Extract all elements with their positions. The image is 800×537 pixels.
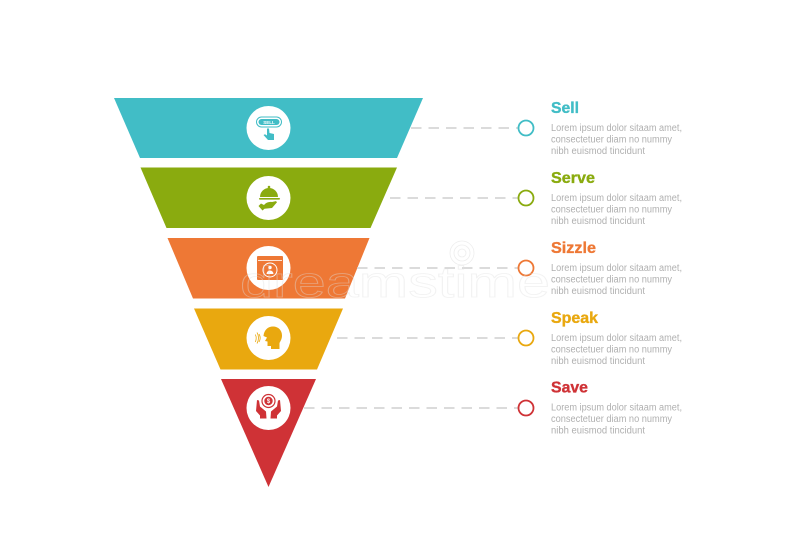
connector: sell: [411, 127, 519, 129]
connector: speak: [337, 337, 519, 339]
watermark: dreamstime: [240, 258, 550, 307]
icon: serving cloche on hand: [246, 176, 290, 220]
funnel layer: sizzle: [168, 238, 370, 298]
text block: sizzle: Lorem ipsum dolor sitaam amet,: [551, 263, 682, 274]
text block: sizzle: nibh euismod tincidunt: [551, 286, 645, 297]
icon: sell button with pointing hand: SELL: [263, 120, 275, 125]
text block: sell: [551, 100, 682, 157]
text block: sell: consectetuer diam no nummy: [551, 134, 672, 146]
text block: sizzle: [551, 240, 682, 297]
watermark: [240, 241, 550, 307]
funnel: [114, 98, 423, 487]
text block: sell: Lorem ipsum dolor sitaam amet,: [551, 123, 682, 134]
node: sizzle: [518, 260, 534, 276]
connector: serve: [390, 197, 519, 199]
icon: speaking head: [246, 316, 290, 360]
text block: save: Lorem ipsum dolor sitaam amet,: [551, 402, 682, 414]
node: speak: [518, 330, 534, 346]
text block: speak: Lorem ipsum dolor sitaam amet,: [551, 333, 682, 344]
text block: serve: consectetuer diam no nummy: [551, 204, 672, 216]
funnel layer: sell: [114, 98, 423, 158]
text block: speak: nibh euismod tincidunt: [551, 356, 645, 367]
text block: save: consectetuer diam no nummy: [551, 414, 672, 425]
node: save: [518, 400, 534, 416]
icon: sell button with pointing hand: [246, 106, 290, 150]
text block: speak: [551, 310, 682, 367]
text block: speak: consectetuer diam no nummy: [551, 344, 672, 356]
text block: serve: nibh euismod tincidunt: [551, 216, 645, 227]
text block: serve: Lorem ipsum dolor sitaam amet,: [551, 193, 682, 204]
text block: sizzle: Sizzle: [551, 240, 596, 257]
text block: sizzle: consectetuer diam no nummy: [551, 274, 672, 286]
node: sell: [518, 120, 534, 136]
funnel layer: speak: [194, 308, 343, 370]
node: serve: [518, 190, 534, 206]
text block: serve: Serve: [551, 170, 595, 187]
connector: save: [304, 407, 519, 409]
icon: hands holding coin: [246, 386, 290, 430]
text block: sell: nibh euismod tincidunt: [551, 146, 645, 157]
text block: sell: Sell: [551, 100, 579, 117]
funnel layer: save: [221, 379, 316, 487]
funnel layer: serve: [140, 168, 397, 228]
text block: serve: [551, 170, 682, 227]
text block: save: Save: [551, 380, 588, 396]
connector: sizzle: [357, 267, 519, 269]
icon: browser window with person: [246, 246, 290, 290]
icon: hands holding coin: $: [267, 399, 271, 405]
text block: speak: Speak: [551, 310, 598, 327]
text block: save: [551, 380, 682, 436]
text block: save: nibh euismod tincidunt: [551, 426, 645, 436]
watermark: dreamstime: [240, 258, 550, 307]
